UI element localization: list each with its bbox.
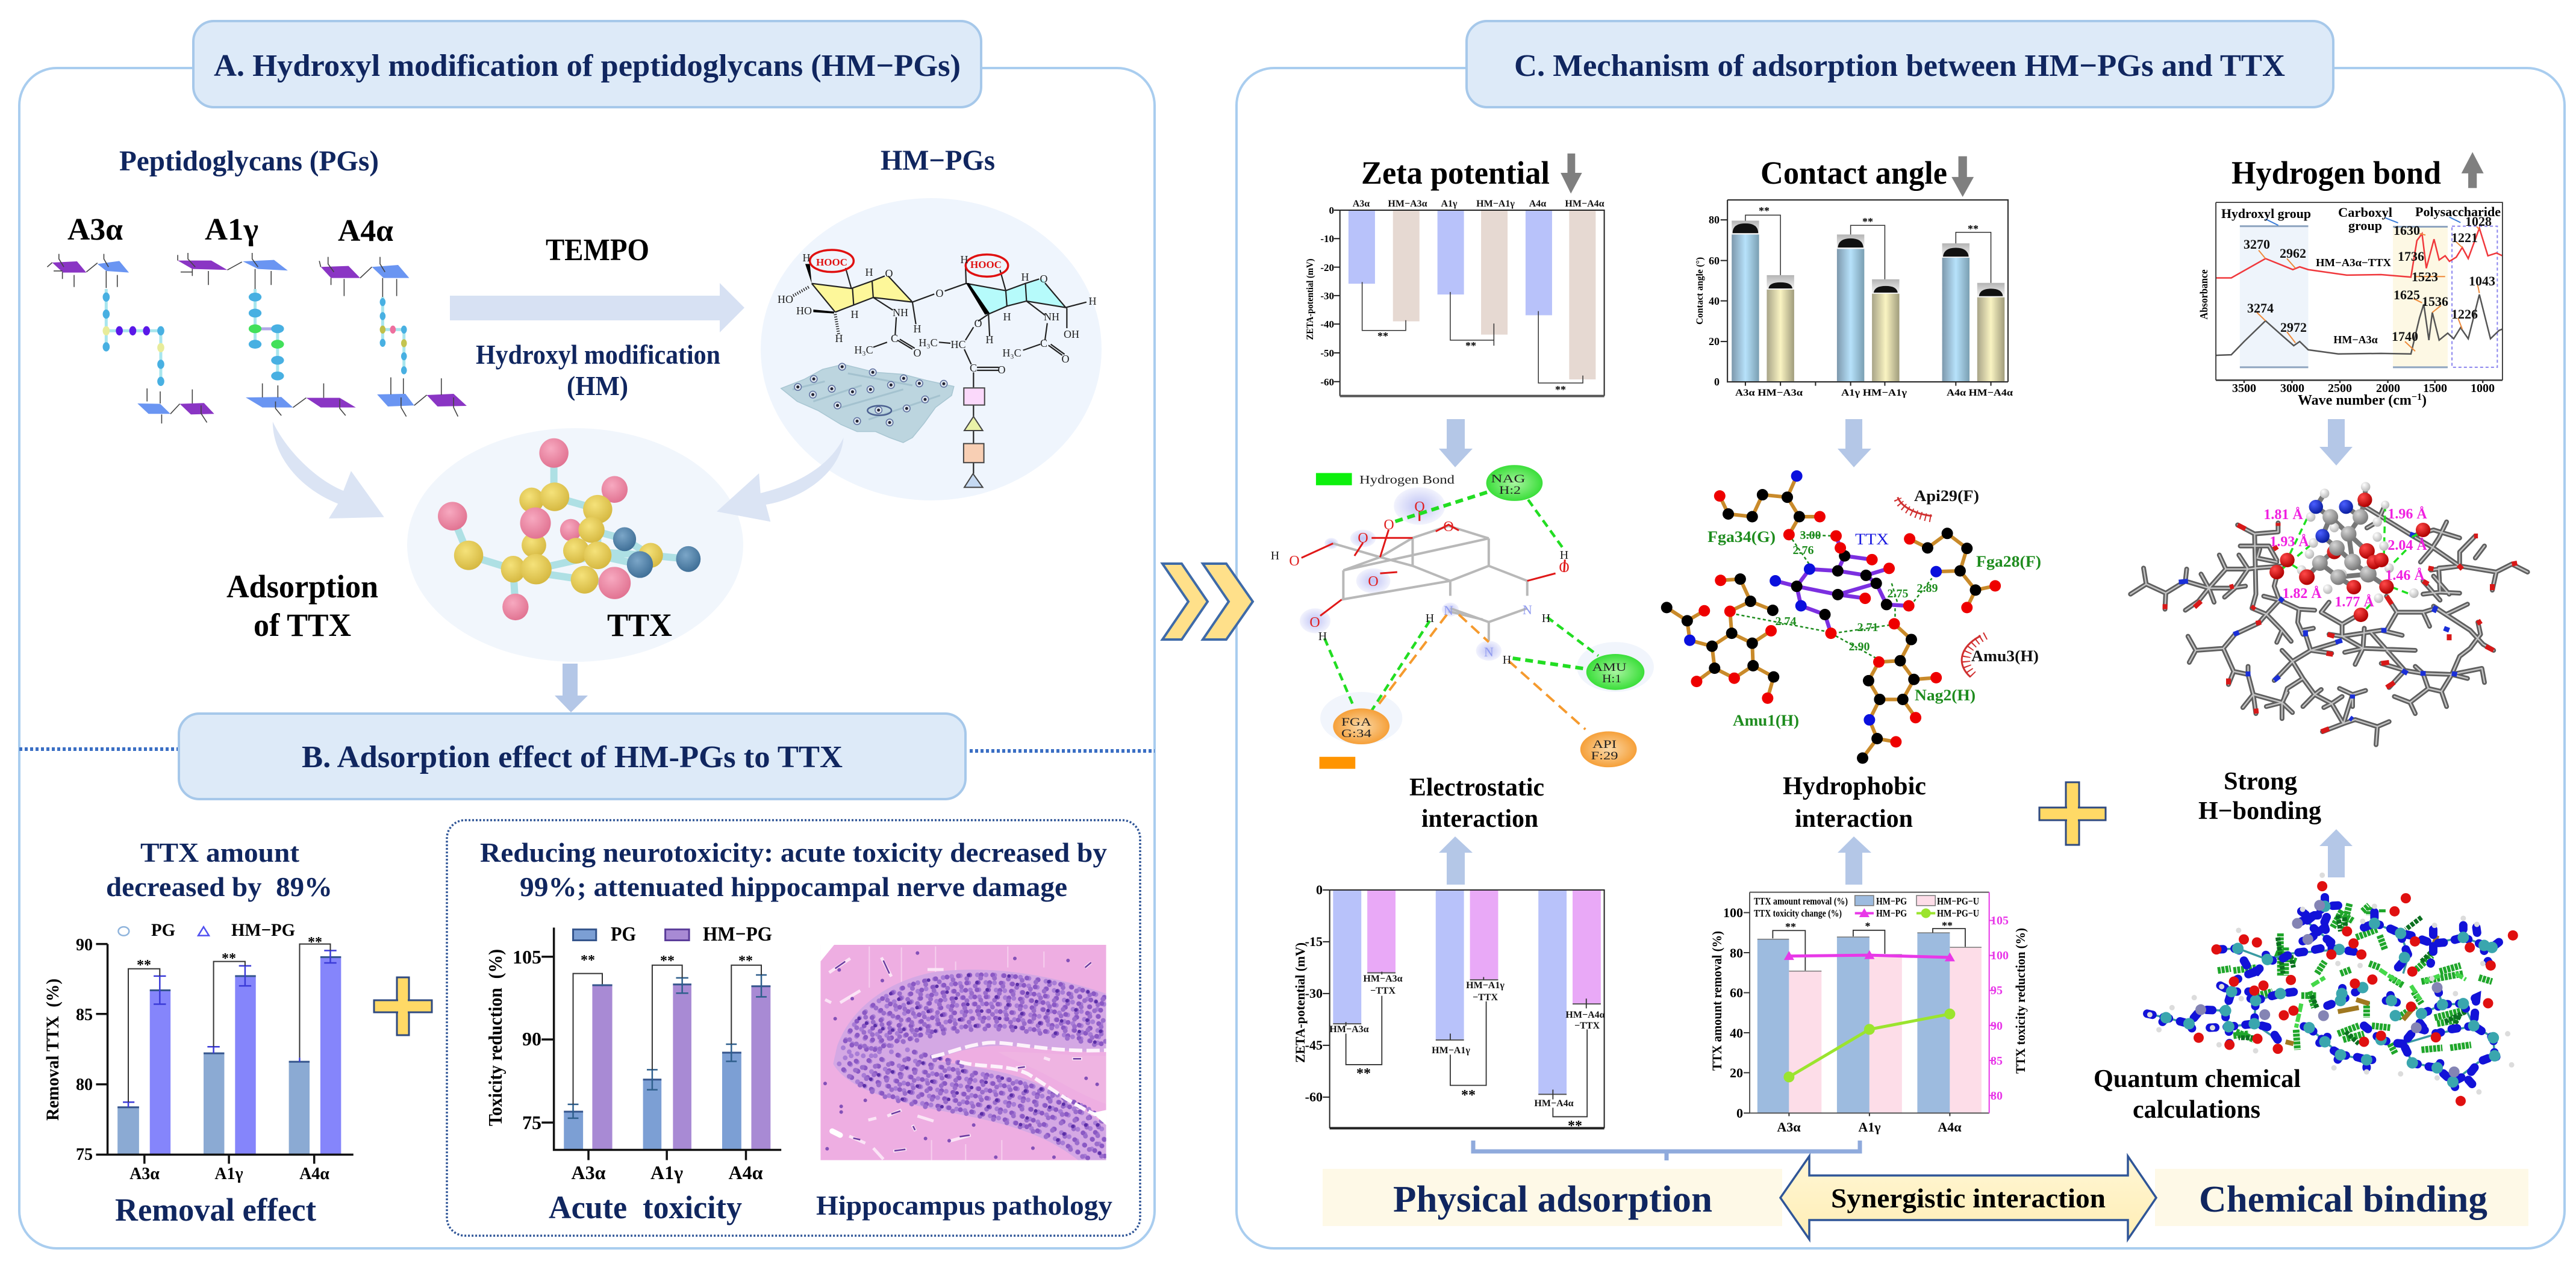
structure atom labels: [778, 252, 1096, 376]
chart: TTX amount removal and toxicity: A1γ: [1858, 1119, 1881, 1135]
label adsorption of TTX: [226, 568, 378, 643]
chart: FTIR hydrogen bond: [2198, 202, 2503, 408]
legend text: Hydrogen Bond: [1359, 473, 1455, 487]
chart: acute toxicity: **: [581, 953, 595, 968]
chart: TTX amount removal and toxicity: HM−PG: [1876, 895, 1907, 907]
chart: zeta potential top: HM−A3α: [1388, 199, 1427, 209]
chart: zeta potential top: ZETA-potential (mV): [1305, 259, 1315, 340]
diagram: hydrophobic interaction: Nag2(H): [1915, 686, 1976, 704]
structure atom labels: HOOC: [816, 257, 847, 268]
heading: zeta potential: Zeta potential: [1361, 155, 1550, 191]
heading: contact angle: Contact angle: [1760, 155, 1947, 191]
chart: zeta potential bottom: −TTX: [1574, 1021, 1600, 1031]
label: hydrophobic interaction: Hydrophobic: [1783, 773, 1926, 800]
chart: zeta potential bottom: -45: [1305, 1038, 1323, 1053]
chart: contact angle: A3α HM−A3α: [1735, 388, 1803, 398]
diagram: electrostatic interaction: O: [1289, 553, 1300, 569]
structure atom labels: H: [960, 254, 968, 266]
diagram: hydrogen bonding 3D: 1.46 Å: [2385, 568, 2425, 584]
chart: removal TTX: **: [308, 935, 322, 950]
structure atom labels: O: [885, 267, 893, 279]
chart: acute toxicity: 90: [522, 1028, 541, 1050]
chart: FTIR hydrogen bond: 1536: [2422, 294, 2448, 309]
chart: FTIR hydrogen bond: 1736: [2398, 249, 2424, 264]
diagram: hydrophobic interaction: [1667, 476, 2041, 758]
chart: TTX amount removal and toxicity: TTX toxicity change (%): [1754, 908, 1842, 919]
chart: zeta potential top: [1305, 199, 1605, 396]
chart: FTIR hydrogen bond: HM−A3α−TTX: [2316, 257, 2391, 269]
chart: FTIR hydrogen bond: 1043: [2469, 273, 2495, 288]
diagram: electrostatic interaction: O: [1358, 531, 1368, 546]
diagram: hydrogen bonding 3D: 1.96 Å: [2387, 506, 2427, 522]
chart: acute toxicity: A4α: [729, 1162, 763, 1183]
chart: zeta potential bottom: HM−A1γ: [1432, 1045, 1470, 1056]
chart: TTX amount removal and toxicity: 20: [1730, 1065, 1743, 1080]
chart: removal TTX: **: [222, 951, 236, 967]
structure atom labels: C: [891, 332, 898, 344]
label: hydrophobic interaction: [1783, 773, 1926, 833]
chart: FTIR hydrogen bond: 1625: [2394, 287, 2420, 302]
diagram: electrostatic interaction: [1271, 465, 1654, 769]
chart: FTIR hydrogen bond: Wave number (cm: [2298, 393, 2412, 408]
text: reducing neurotoxicity: Reducing neurotoxicity: acute toxicity decreased by: [480, 837, 1107, 868]
label A4a: A4α: [338, 214, 393, 248]
caption: removal effect: Removal effect: [115, 1192, 316, 1228]
arrow: hydrogen down: [2319, 419, 2353, 465]
chart: zeta potential top: -20: [1320, 262, 1334, 273]
heading text C: C. Mechanism of adsorption between HM−PGs and TTX: [1514, 49, 2285, 83]
diagram: electrostatic interaction: API: [1592, 738, 1617, 751]
heading: hydrogen bond: Hydrogen bond: [2231, 155, 2441, 191]
arrow: A to B: [555, 664, 588, 712]
glycan chain: [964, 388, 985, 405]
diagram: electrostatic interaction: N: [1484, 644, 1494, 659]
heading box C: [1467, 21, 2333, 107]
label: quantum chemical calculations: [2094, 1065, 2301, 1124]
text physical adsorption: Physical adsorption: [1393, 1179, 1712, 1220]
TTX 3D molecule: [438, 438, 700, 620]
label: electrostatic interaction: interaction: [1421, 805, 1538, 833]
chart: TTX amount removal and toxicity: 95: [1991, 984, 2003, 997]
chart: TTX amount removal and toxicity: 80: [1991, 1089, 2003, 1103]
chart: zeta potential bottom: -60: [1305, 1089, 1323, 1104]
chart: removal TTX: Removal TTX (%): [43, 979, 63, 1121]
label A3a: A3α: [67, 213, 123, 247]
chart: zeta potential top: -30: [1320, 290, 1334, 302]
structure atom labels: HO: [778, 293, 793, 305]
text: TTX amount decreased: TTX amount: [140, 837, 300, 868]
chart: acute toxicity: A3α: [572, 1162, 606, 1183]
structure atom labels: OH: [1064, 328, 1079, 340]
curved arrow: HM-PGs to TTX: [717, 438, 843, 521]
structure atom labels: H: [1003, 311, 1011, 323]
diagram: electrostatic interaction: O: [1559, 560, 1570, 576]
chart: removal TTX: A1γ: [214, 1165, 243, 1183]
diagram: electrostatic interaction: H:2: [1499, 484, 1521, 497]
chart: FTIR hydrogen bond: 2962: [2280, 246, 2306, 261]
chart: zeta potential top: HM−A1γ: [1476, 199, 1515, 209]
chart: TTX amount removal and toxicity: TTX amount removal (%): [1709, 931, 1724, 1071]
chart: TTX amount removal and toxicity: 40: [1730, 1026, 1743, 1041]
chart: zeta potential bottom: [1293, 882, 1605, 1134]
chart: acute toxicity: [484, 923, 781, 1183]
structure atom labels: O: [975, 317, 982, 329]
HM-PG structure bubble: [761, 198, 1102, 500]
label A1g: A1γ: [205, 213, 258, 247]
label: strong H-bonding: H−bonding: [2198, 797, 2321, 825]
chart: zeta potential bottom: **: [1568, 1118, 1582, 1134]
panel: right outer frame: [1237, 68, 2565, 1248]
chart: removal TTX: **: [137, 957, 151, 973]
chart: removal TTX: 80: [76, 1076, 93, 1094]
chart: contact angle: **: [1862, 216, 1873, 228]
heading: HM-PGs: HM−PGs: [881, 145, 995, 176]
chart: zeta potential bottom: −TTX: [1370, 986, 1396, 996]
chart: FTIR hydrogen bond: 3270: [2244, 237, 2270, 252]
label: strong H-bonding: [2198, 768, 2321, 825]
chart: TTX amount removal and toxicity: TTX amount removal (%): [1754, 895, 1848, 907]
chart: TTX amount removal and toxicity: *: [1865, 920, 1871, 932]
chart: TTX amount removal and toxicity: TTX toxicity reduction (%): [2013, 928, 2028, 1074]
chart: FTIR hydrogen bond: 1630: [2394, 223, 2420, 238]
double chevron between panels: [1162, 564, 1253, 640]
label TEMPO: TEMPO: [546, 233, 649, 267]
chart: contact angle: 20: [1709, 335, 1720, 347]
chart: removal TTX: HM−PG: [231, 920, 295, 940]
text: TTX amount decreased: decreased by 89%: [106, 871, 332, 902]
structure atom labels: O: [936, 287, 943, 299]
diagram: electrostatic interaction: N: [1523, 602, 1532, 617]
chart: acute toxicity: **: [660, 953, 675, 969]
chart: contact angle: [1695, 200, 2013, 398]
diagram: electrostatic interaction: F:29: [1591, 750, 1618, 762]
structure atom labels: HO: [796, 305, 812, 317]
text chemical binding: Chemical binding: [2199, 1179, 2487, 1220]
diagram: hydrophobic interaction: 2.90: [1849, 640, 1870, 653]
structure atom labels: HOOC: [970, 259, 1002, 270]
box: physical adsorption: [1323, 1169, 1782, 1226]
chart: FTIR hydrogen bond: −1: [2412, 392, 2422, 402]
chart: acute toxicity: A1γ: [650, 1162, 683, 1183]
diagram: electrostatic interaction: H: [1503, 653, 1511, 667]
structure atom labels: O: [913, 347, 922, 359]
chart: removal TTX: A4α: [299, 1165, 329, 1183]
chart: contact angle: **: [1968, 223, 1979, 235]
diagram: hydrophobic interaction: Amu1(H): [1733, 712, 1799, 729]
chart: zeta potential bottom: HM−A3α: [1363, 974, 1403, 984]
label: electrostatic interaction: [1409, 774, 1544, 833]
structure atom labels: H: [850, 308, 859, 320]
chart: contact angle: Contact angle (°): [1695, 257, 1705, 325]
structure atom labels: NH: [893, 307, 908, 319]
chart: zeta potential top: A4α: [1529, 199, 1546, 209]
chart: TTX amount removal and toxicity: 0: [1736, 1106, 1743, 1121]
chart: zeta potential bottom: HM−A4α: [1534, 1098, 1574, 1109]
structure atom labels: NH: [1044, 311, 1059, 323]
diagram: electrostatic interaction: N: [1444, 603, 1453, 618]
curved arrow: PGs to TTX: [273, 422, 384, 518]
chart: contact angle: 40: [1709, 295, 1720, 307]
heading box B: [179, 714, 965, 799]
chart: zeta potential bottom: -15: [1305, 934, 1323, 949]
diagram: hydrophobic interaction: 2.76: [1792, 544, 1814, 557]
chart: TTX amount removal and toxicity: HM−PG: [1876, 908, 1907, 919]
chart: TTX amount removal and toxicity: 90: [1991, 1020, 2003, 1033]
chart: acute toxicity: **: [738, 953, 753, 969]
chart: zeta potential bottom: HM−A3α: [1329, 1024, 1369, 1035]
chart: zeta potential top: A1γ: [1441, 199, 1458, 209]
chart: zeta potential top: -60: [1320, 376, 1334, 388]
chart: TTX amount removal and toxicity: HM−PG−U: [1937, 908, 1979, 919]
TTX bubble: [407, 428, 743, 662]
chart: zeta potential bottom: −TTX: [1473, 992, 1498, 1003]
text synergistic interaction: Synergistic interaction: [1831, 1183, 2106, 1213]
diagram: hydrophobic interaction: Fga34(G): [1707, 528, 1776, 546]
structure atom labels: C: [970, 362, 977, 374]
arrow: electrostatic up: [1439, 836, 1473, 885]
chart: removal TTX: 90: [76, 936, 93, 954]
diagram: electrostatic interaction: AMU: [1592, 661, 1627, 674]
arrow: TEMPO: [450, 283, 744, 332]
label: quantum chemical calculations: calculations: [2133, 1096, 2260, 1124]
chart: FTIR hydrogen bond: 1000: [2471, 382, 2495, 395]
diagram: hydrogen bonding 3D: 1.93 Å: [2269, 534, 2309, 550]
chart: zeta potential top: -40: [1320, 319, 1334, 330]
chart: zeta potential top: HM−A4α: [1565, 199, 1605, 209]
chart: TTX amount removal and toxicity: **: [1785, 921, 1796, 933]
diagram: hydrophobic interaction: 2.75: [1888, 587, 1908, 600]
diagram: electrostatic interaction: H: [1542, 612, 1550, 625]
structure atom labels: HC: [950, 338, 966, 350]
panel: left outer frame: [19, 68, 1155, 1248]
chart: TTX amount removal and toxicity: [1709, 892, 2028, 1135]
chart: removal TTX: A3α: [129, 1165, 160, 1183]
arrow: zeta down: [1439, 419, 1473, 467]
chart: contact angle: A1γ HM−A1γ: [1841, 388, 1907, 398]
arrow: contact down: [1838, 419, 1871, 467]
chart: removal TTX: PG: [151, 920, 175, 940]
diagram: hydrophobic interaction: 2.74: [1776, 615, 1796, 628]
chart: FTIR hydrogen bond: Carboxyl: [2338, 205, 2392, 220]
text: reducing neurotoxicity: [480, 837, 1107, 902]
chart: FTIR hydrogen bond: 3500: [2232, 382, 2256, 395]
arrow: hydrophobic up: [1838, 836, 1871, 885]
chart: FTIR hydrogen bond: ): [2422, 393, 2427, 408]
peptidoglycan structures A3a A1g A4a: [47, 213, 467, 423]
chart: FTIR hydrogen bond: 2000: [2376, 382, 2400, 395]
chart: TTX amount removal and toxicity: 105: [1991, 914, 2009, 927]
chart: FTIR hydrogen bond: 1226: [2451, 307, 2478, 322]
diagram: electrostatic interaction: H:1: [1602, 673, 1621, 685]
label adsorption of TTX: of TTX: [254, 607, 351, 643]
diagram: hydrophobic interaction: 3.00: [1800, 529, 1821, 542]
chart: FTIR hydrogen bond: HM−A3α: [2333, 334, 2378, 346]
diagram: electrostatic interaction: H: [1560, 549, 1568, 562]
label: hydrophobic interaction: interaction: [1795, 805, 1913, 833]
box: chemical binding: [2155, 1169, 2528, 1226]
chart: TTX amount removal and toxicity: 100: [1991, 949, 2009, 962]
structure atom labels: H: [835, 332, 843, 344]
diagram: hydrogen bonding 3D: 1.82 Å: [2282, 586, 2322, 602]
chart: acute toxicity: Toxicity reduction (%): [484, 949, 506, 1126]
diagram: electrostatic interaction: H: [1271, 549, 1279, 562]
label adsorption of TTX: Adsorption: [226, 568, 378, 605]
chart: zeta potential top: **: [1465, 340, 1476, 352]
structure atom labels: H: [1021, 271, 1029, 283]
chart: FTIR hydrogen bond: Polysaccharide: [2415, 204, 2501, 219]
structure atom labels: C: [1040, 337, 1047, 349]
diagram: electrostatic interaction: FGA: [1341, 716, 1371, 729]
diagram: hydrogen bonding 3D: 1.77 Å: [2334, 594, 2374, 610]
diagram: hydrophobic interaction: 2.89: [1916, 582, 1938, 595]
structure atom labels: O: [1040, 273, 1048, 285]
diagram: hydrophobic interaction: 2.71: [1857, 621, 1878, 634]
chart: acute toxicity: HM−PG: [703, 923, 772, 945]
diagram: hydrophobic interaction: Amu3(H): [1971, 647, 2039, 665]
label: strong H-bonding: Strong: [2224, 768, 2297, 795]
diagram: hydrophobic interaction: Fga28(F): [1976, 553, 2041, 570]
chart: TTX amount removal and toxicity: **: [1942, 920, 1953, 932]
diagram: electrostatic interaction: NAG: [1491, 473, 1526, 485]
diagram: electrostatic interaction: O: [1368, 574, 1379, 590]
structure atom labels: H₃C: [918, 337, 938, 349]
diagram: hydrogen bonding 3D: [2130, 482, 2528, 745]
chart: zeta potential bottom: **: [1356, 1066, 1371, 1082]
arrow: contact decreases: [1951, 156, 1974, 197]
structure atom labels: O: [997, 364, 1006, 376]
chart: contact angle: A4α HM−A4α: [1947, 388, 2013, 398]
label: quantum chemical calculations: Quantum chemical: [2094, 1065, 2301, 1093]
chart: acute toxicity: PG: [611, 923, 636, 945]
chart: contact angle: 60: [1709, 255, 1720, 267]
chart: FTIR hydrogen bond: 1028: [2465, 214, 2492, 229]
chart: removal TTX: 85: [76, 1006, 93, 1024]
hippocampus micrograph: [820, 945, 1108, 1162]
chart: contact angle: **: [1759, 205, 1770, 217]
chart: TTX amount removal and toxicity: A3α: [1777, 1119, 1801, 1135]
heading text A: A. Hydroxyl modification of peptidoglycans (HM−PGs): [214, 49, 961, 83]
diagram: electrostatic interaction: O: [1414, 499, 1425, 515]
chart: FTIR hydrogen bond: 1221: [2451, 230, 2478, 245]
chart: FTIR hydrogen bond: 3274: [2247, 300, 2274, 316]
chart: FTIR hydrogen bond: 2500: [2328, 382, 2352, 395]
glycan drawings: [47, 253, 467, 423]
diagram: hydrogen bonding 3D: 2.04 Å: [2387, 538, 2427, 553]
chart: FTIR hydrogen bond: Absorbance: [2198, 270, 2210, 319]
chart: contact angle: 0: [1714, 376, 1720, 388]
chart: FTIR hydrogen bond: 2972: [2280, 320, 2307, 335]
diagram: hydrophobic interaction: Api29(F): [1914, 487, 1979, 505]
chart: TTX amount removal and toxicity: 85: [1991, 1054, 2003, 1068]
chart: removal TTX: 75: [76, 1145, 93, 1164]
chart: zeta potential top: **: [1377, 330, 1388, 342]
chart: FTIR hydrogen bond: 1740: [2392, 329, 2418, 344]
chart: FTIR hydrogen bond: 1523: [2412, 269, 2438, 284]
chart: FTIR hydrogen bond: 3000: [2280, 382, 2304, 395]
plus sign left: [374, 977, 432, 1035]
label hydroxyl modification: Hydroxyl modification: [476, 339, 720, 370]
quantum chemical calculations network: [2147, 875, 2513, 1101]
chart: acute toxicity: 105: [513, 946, 541, 968]
structure atom labels: H₃C: [854, 344, 873, 356]
caption: hippocampus pathology: Hippocampus pathology: [816, 1190, 1112, 1221]
structure atom labels: H: [865, 266, 873, 278]
chart: TTX amount removal and toxicity: HM−PG−U: [1937, 895, 1979, 907]
chart: TTX amount removal and toxicity: 100: [1723, 905, 1743, 920]
plus sign right: [2039, 782, 2106, 845]
chart: TTX amount removal and toxicity: 60: [1730, 985, 1743, 1000]
chart: FTIR hydrogen bond: Hydroxyl group: [2221, 206, 2311, 221]
chart: FTIR hydrogen bond: group: [2348, 218, 2382, 233]
chart: removal TTX: [43, 920, 354, 1183]
structure atom labels: O: [1061, 353, 1070, 365]
label: electrostatic interaction: Electrostatic: [1409, 774, 1544, 802]
chart: zeta potential bottom: -30: [1305, 986, 1323, 1001]
panel: neurotoxicity dashed box: [447, 820, 1140, 1236]
structure atom labels: H: [1089, 295, 1096, 307]
diagram: electrostatic interaction: H: [1318, 630, 1327, 643]
diagram: electrostatic interaction: G:34: [1341, 727, 1372, 740]
heading text B: B. Adsorption effect of HM-PGs to TTX: [302, 740, 843, 774]
structure atom labels: H: [913, 323, 922, 335]
text: reducing neurotoxicity: 99%; attenuated hippocampal nerve damage: [520, 871, 1067, 902]
diagram: electrostatic interaction: O: [1309, 615, 1320, 630]
arrow: hydrogen bond increases: [2462, 152, 2484, 188]
chart: zeta potential top: **: [1555, 384, 1566, 396]
chart: TTX amount removal and toxicity: A4α: [1938, 1119, 1962, 1135]
diagram: electrostatic interaction: O: [1443, 519, 1454, 535]
chart: zeta potential top: 0: [1329, 205, 1334, 216]
arrow: H-bonding up: [2319, 829, 2353, 877]
chart: zeta potential top: -10: [1320, 233, 1334, 244]
diagram: hydrophobic interaction: TTX: [1855, 531, 1889, 548]
chart: zeta potential bottom: ZETA-potential (mV): [1293, 942, 1308, 1063]
text: TTX amount decreased: [106, 837, 332, 902]
chart: TTX amount removal and toxicity: 80: [1730, 945, 1743, 960]
chart: zeta potential bottom: HM−A4α: [1565, 1010, 1605, 1020]
TTX label: TTX: [607, 607, 672, 643]
diagram: electrostatic interaction: H: [1426, 612, 1434, 625]
diagram: hydrogen bonding 3D: 1.81 Å: [2263, 507, 2303, 523]
chart: contact angle: 80: [1709, 214, 1720, 226]
chemical structure: [781, 250, 1087, 487]
chart: FTIR hydrogen bond: 1500: [2423, 382, 2447, 395]
chart: zeta potential bottom: HM−A1γ: [1466, 980, 1505, 991]
blue nanosheet: [781, 364, 954, 443]
structure atom labels: H: [802, 252, 811, 264]
heading: Peptidoglycans: Peptidoglycans (PGs): [119, 145, 379, 177]
chart: zeta potential top: A3α: [1353, 199, 1370, 209]
arrow: zeta decreases: [1561, 154, 1582, 193]
double arrow: synergistic interaction: [1780, 1156, 2156, 1239]
chart: zeta potential bottom: **: [1461, 1088, 1476, 1103]
chart: zeta potential bottom: 0: [1316, 882, 1323, 897]
label HM: (HM): [567, 370, 628, 401]
heading box A: [193, 21, 981, 107]
caption: acute toxicity: Acute toxicity: [549, 1189, 742, 1225]
structure atom labels: H₃C: [1002, 347, 1021, 359]
diagram: electrostatic interaction: O: [1383, 517, 1394, 533]
bracket: physical adsorption: [1473, 1141, 1860, 1160]
chart: zeta potential top: -50: [1320, 347, 1334, 359]
chart: acute toxicity: 75: [522, 1112, 541, 1133]
structure atom labels: H: [985, 334, 994, 346]
